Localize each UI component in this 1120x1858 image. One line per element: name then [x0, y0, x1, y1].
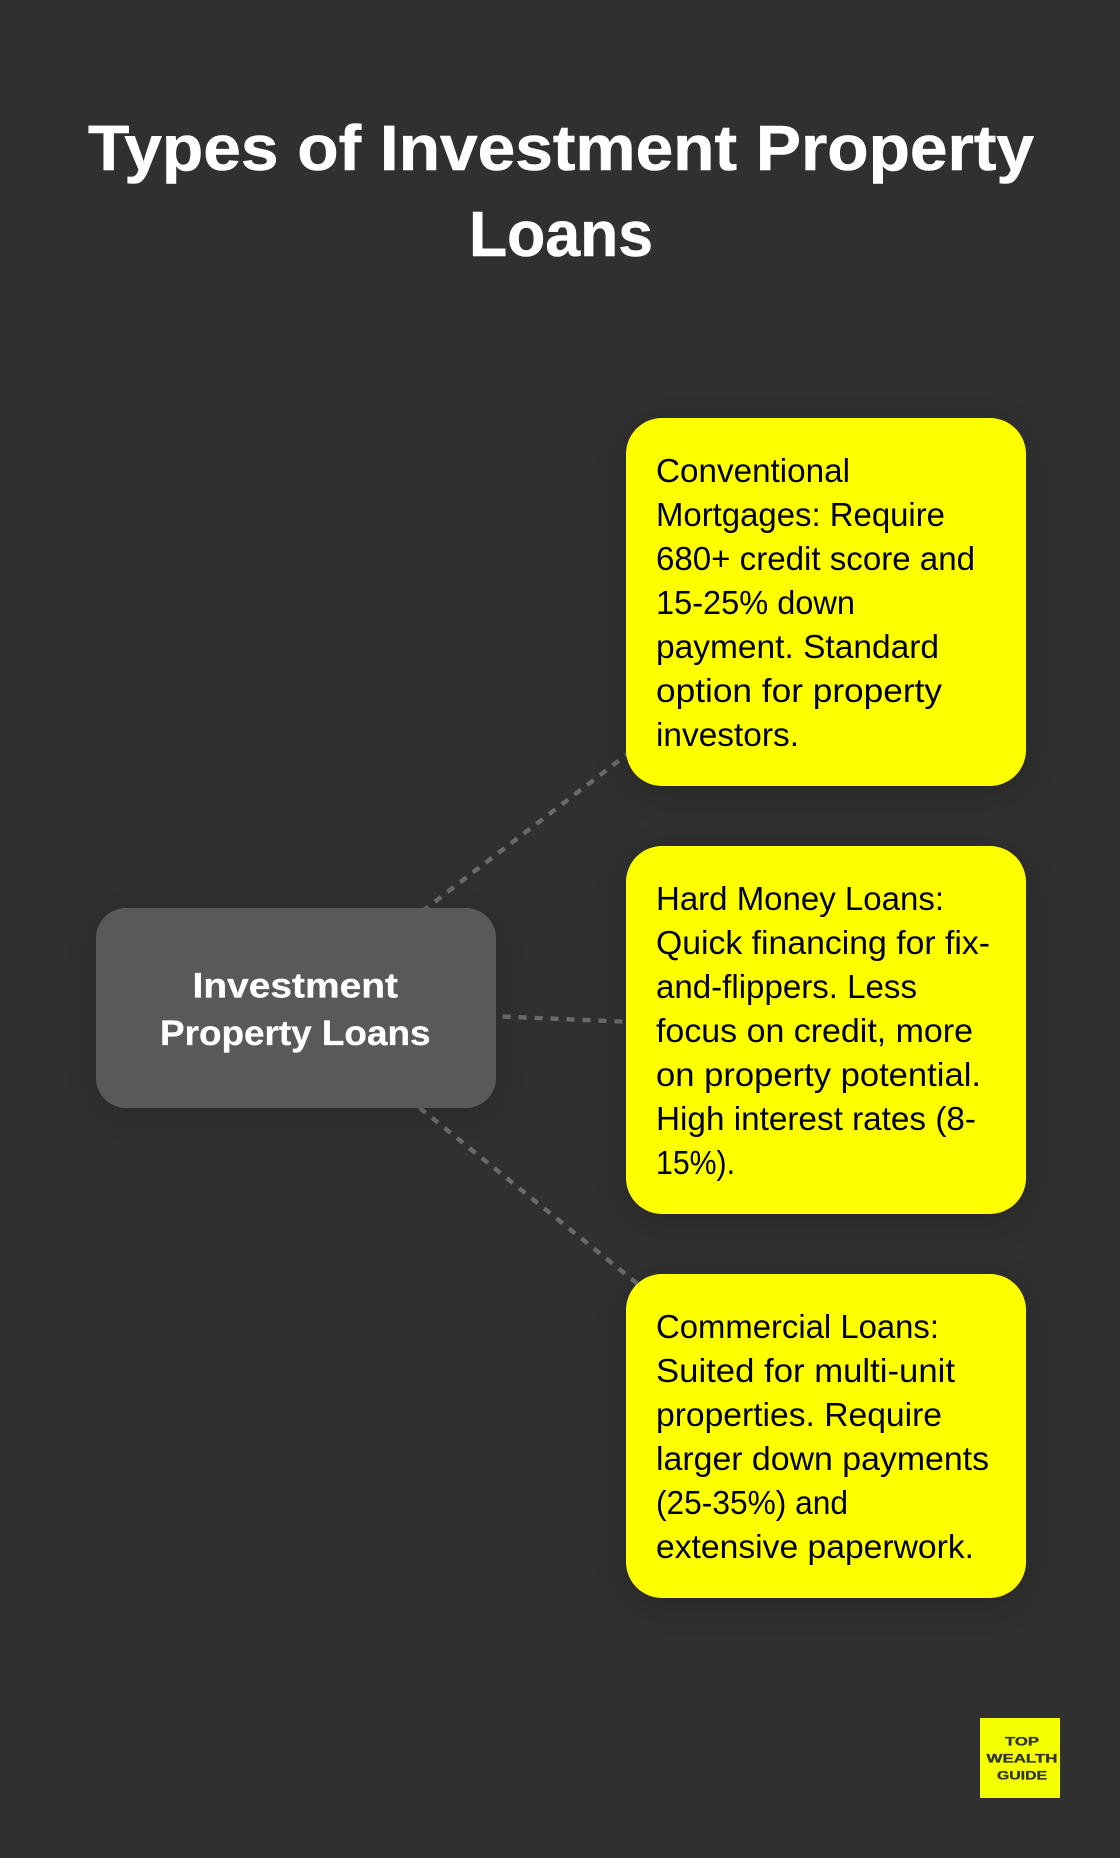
card: Commercial Loans: Commercial Loans:	[656, 1308, 939, 1345]
logo: Top Wealth Guide	[980, 1718, 1060, 1798]
card: Commercial Loans	[626, 1274, 1026, 1598]
card: Hard Money Loans: Quick financing for fix-	[656, 924, 990, 961]
title: Types of Investment Property	[88, 112, 1034, 184]
logo: Top Wealth Guide: GUIDE	[997, 1770, 1047, 1782]
logo: Top Wealth Guide: WEALTH	[986, 1754, 1058, 1766]
card: Hard Money Loans: 15%).	[656, 1144, 735, 1181]
card: Conventional Mortgages	[626, 418, 1026, 786]
card: Conventional Mortgages: Conventional	[656, 452, 850, 489]
card: Conventional Mortgages: payment. Standard	[656, 628, 939, 665]
title: Loans	[469, 198, 653, 270]
card: Commercial Loans: Suited for multi-unit	[656, 1352, 955, 1389]
card: Hard Money Loans: Hard Money Loans:	[656, 880, 944, 917]
logo: Top Wealth Guide: TOP	[1005, 1736, 1039, 1748]
card: Hard Money Loans	[626, 846, 1026, 1214]
card: Hard Money Loans: and-flippers. Less	[656, 968, 917, 1005]
card: Commercial Loans: properties. Require	[656, 1396, 942, 1433]
card: Commercial Loans: (25-35%) and	[656, 1484, 848, 1521]
card: Conventional Mortgages: option for property	[656, 672, 943, 709]
card: Conventional Mortgages: investors.	[656, 716, 799, 753]
card: Hard Money Loans: on property potential.	[656, 1056, 981, 1093]
title	[88, 112, 1034, 270]
hub: Investment Property Loans	[96, 908, 496, 1108]
hub: Investment Property Loans: Property Loans	[160, 1014, 430, 1053]
card: Hard Money Loans: focus on credit, more	[656, 1012, 973, 1049]
card: Conventional Mortgages: 15-25% down	[656, 584, 855, 621]
card: Hard Money Loans: High interest rates (8-	[656, 1100, 976, 1137]
card: Commercial Loans: larger down payments	[656, 1440, 989, 1477]
card: Conventional Mortgages: 680+ credit score and	[656, 540, 975, 577]
card: Commercial Loans: extensive paperwork.	[656, 1528, 974, 1565]
hub: Investment Property Loans: Investment	[192, 966, 398, 1006]
card: Conventional Mortgages: Mortgages: Require	[656, 496, 945, 533]
